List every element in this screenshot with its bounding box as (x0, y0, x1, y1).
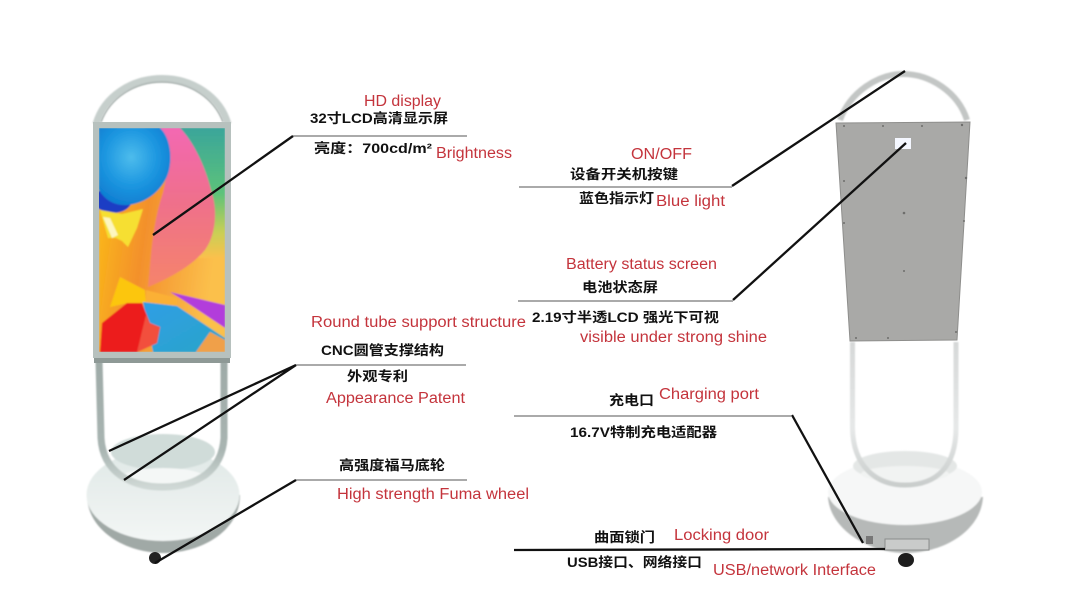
leader line (732, 71, 905, 186)
back upper arch (840, 74, 967, 120)
back wheel (898, 553, 914, 567)
callout: on/off: 蓝色指示灯 (579, 190, 655, 206)
leader lines (109, 365, 296, 480)
USB port (866, 536, 873, 544)
callout: HD display: Brightness (436, 145, 512, 162)
callout: battery status: 2.19寸半透LCD 强光下可视 (532, 309, 720, 325)
callout: Fuma wheel: High strength Fuma wheel (337, 486, 529, 503)
front screen bezel (93, 122, 231, 358)
callout: battery status (518, 143, 906, 346)
front wheel (149, 552, 161, 564)
callout: locking door / USB: USB/network Interface (713, 562, 876, 579)
callout: on/off: Blue light (656, 193, 726, 210)
front base (86, 434, 240, 553)
callout: on/off: 设备开关机按键 (570, 166, 679, 182)
leader line (514, 549, 885, 550)
front lower tube frame (99, 360, 224, 487)
callout: Fuma wheel: 高强度福马底轮 (339, 457, 446, 473)
callout: locking door / USB: 曲面锁门 (594, 529, 655, 545)
panel screws (843, 124, 967, 339)
leader line (792, 415, 863, 543)
callout: battery status: Battery status screen (566, 256, 717, 273)
back door panel (885, 539, 929, 550)
battery status screen (895, 138, 911, 149)
callout: HD display (153, 93, 512, 235)
stand: front view (86, 78, 240, 564)
callout: charging port (514, 386, 863, 543)
callout: HD display: 亮度：700cd/m² (314, 140, 433, 156)
leader line (153, 136, 293, 235)
callout: round tube support (109, 314, 526, 480)
leader line (733, 143, 906, 300)
callout: locking door / USB (514, 527, 885, 579)
leader line (155, 480, 296, 563)
back lower tube frame (852, 342, 956, 485)
back panel (836, 122, 970, 341)
callout: HD display: HD display (364, 93, 441, 110)
callout: HD display: 32寸LCD高清显示屏 (310, 110, 448, 126)
front upper arch (96, 78, 228, 124)
callout: charging port: 充电口 (609, 392, 654, 408)
callout: Fuma wheel (155, 457, 529, 563)
callout: round tube support: Round tube support structure (311, 314, 526, 331)
back base (828, 451, 983, 553)
front screen artwork (94, 128, 225, 352)
callout: locking door / USB: USB接口、网络接口 (567, 554, 702, 570)
callout: on/off: ON/OFF (631, 146, 692, 163)
callout: round tube support: CNC圆管支撑结构 (321, 342, 444, 358)
callout: charging port: 16.7V特制充电适配器 (570, 424, 718, 440)
callout: charging port: Charging port (659, 386, 760, 403)
callout: battery status: 电池状态屏 (582, 279, 658, 295)
callout: round tube support: Appearance Patent (326, 390, 466, 407)
callout: round tube support: 外观专利 (347, 368, 408, 384)
callout: on/off (519, 71, 905, 210)
stand: back view (828, 74, 983, 567)
callout: battery status: visible under strong shine (580, 329, 767, 346)
callout: locking door / USB: Locking door (674, 527, 769, 544)
